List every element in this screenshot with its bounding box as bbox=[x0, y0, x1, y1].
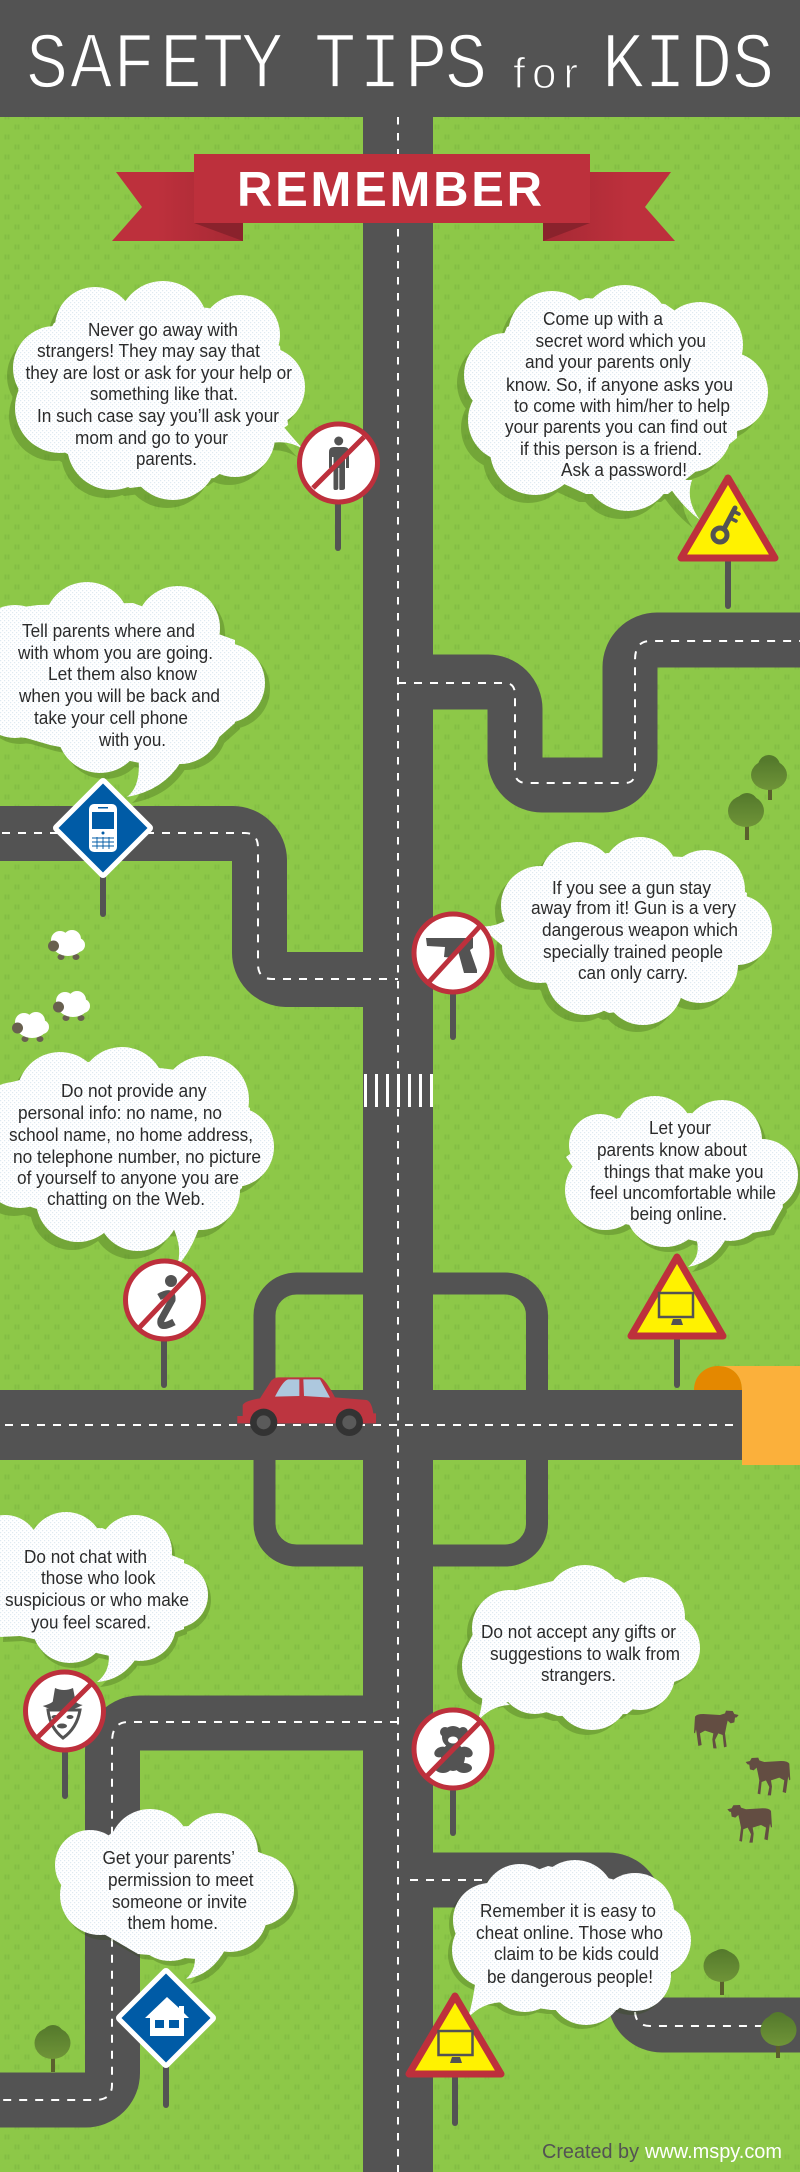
sign: secret key warning bbox=[681, 478, 775, 609]
sign: monitor warning lower bbox=[409, 1996, 501, 2126]
tip text: parents know about bbox=[597, 1140, 747, 1160]
icon: monitor bbox=[659, 1293, 693, 1325]
tip text: claim to be kids could bbox=[494, 1944, 659, 1964]
tip text: secret word which you bbox=[536, 331, 706, 351]
tree bbox=[728, 793, 764, 840]
icon: phone bbox=[89, 804, 117, 852]
lower left road bbox=[0, 1723, 398, 2100]
speech bubble: cheat online bbox=[448, 1860, 691, 2029]
tip text: no telephone number, no picture bbox=[13, 1147, 261, 1167]
tip text bbox=[5, 1547, 189, 1632]
tip text: Let your bbox=[649, 1118, 711, 1138]
tree bbox=[704, 1949, 740, 1995]
right ribbon tail bbox=[543, 172, 675, 241]
sheep 3 bbox=[12, 1012, 49, 1042]
sheep bbox=[12, 930, 90, 1042]
tip text: chatting on the Web. bbox=[47, 1189, 205, 1209]
tip text: when you will be back and bbox=[18, 686, 220, 706]
horizontal road bbox=[0, 1390, 742, 1460]
car bbox=[237, 1377, 376, 1436]
tip text: Let them also know bbox=[48, 664, 198, 684]
tip text: Never go away with bbox=[88, 320, 238, 340]
sheep 1 bbox=[48, 930, 85, 960]
tip text: be dangerous people! bbox=[487, 1967, 653, 1987]
tip text: personal info: no name, no bbox=[18, 1103, 222, 1123]
icon: info letter bbox=[159, 1275, 177, 1326]
tip text: Do not provide any bbox=[61, 1081, 206, 1101]
tip text: with whom you are going. bbox=[17, 643, 213, 663]
tip text: Get your parents’ bbox=[102, 1848, 235, 1868]
speech bubble: gifts bbox=[457, 1565, 700, 1735]
tip text: and your parents only bbox=[525, 352, 691, 372]
sign: cell phone diamond bbox=[57, 782, 149, 917]
crosswalk bbox=[364, 1074, 433, 1107]
icon: key bbox=[713, 508, 739, 542]
tip text: suggestions to walk from bbox=[490, 1644, 680, 1664]
sign: home diamond bbox=[120, 1972, 212, 2108]
icon: house bbox=[145, 1997, 189, 2036]
speech bubble: parents permission bbox=[55, 1809, 298, 1984]
tip text bbox=[17, 621, 220, 750]
tip text: parents. bbox=[136, 449, 197, 469]
tip text: you feel scared. bbox=[31, 1612, 151, 1632]
icon: person bbox=[329, 436, 349, 490]
sign: no gun bbox=[414, 914, 492, 1040]
tip text bbox=[102, 1848, 254, 1933]
tunnel bbox=[694, 1366, 800, 1465]
upper left winding road bbox=[0, 833, 398, 980]
tip text: Do not accept any gifts or bbox=[481, 1622, 676, 1642]
tip text bbox=[481, 1622, 680, 1685]
ring road around crossing bbox=[264, 1284, 537, 1556]
speech bubble: gun bbox=[480, 837, 772, 1032]
title: KIDS bbox=[602, 20, 774, 111]
tip text: being online. bbox=[630, 1204, 727, 1224]
speech bubble: strangers bbox=[7, 281, 305, 508]
tip text: Do not chat with bbox=[24, 1547, 147, 1567]
trees bbox=[34, 755, 796, 2072]
tip text: cheat online. Those who bbox=[476, 1923, 663, 1943]
speech bubble: personal info bbox=[0, 1047, 274, 1268]
tip text: feel uncomfortable while bbox=[590, 1183, 776, 1203]
tip text: If you see a gun stay bbox=[552, 878, 711, 898]
tip text: with you. bbox=[98, 730, 166, 750]
title: SAFETY bbox=[26, 20, 283, 111]
speech bubble: secret word bbox=[457, 285, 768, 528]
icon: gun bbox=[426, 938, 477, 973]
speech bubble: tell parents bbox=[0, 582, 270, 803]
tip text: your parents you can find out bbox=[505, 417, 727, 437]
tip text: suspicious or who make bbox=[5, 1590, 189, 1610]
tip text: take your cell phone bbox=[34, 708, 188, 728]
tree bbox=[34, 2025, 70, 2072]
upper right winding road bbox=[398, 640, 800, 785]
tip text: strangers. bbox=[541, 1665, 616, 1685]
sheep 2 bbox=[53, 991, 90, 1021]
tip text: Tell parents where and bbox=[22, 621, 195, 641]
tip text: mom and go to your bbox=[75, 428, 228, 448]
tip text: permission to meet bbox=[108, 1870, 254, 1890]
tip text: In such case say you’ll ask your bbox=[37, 406, 279, 426]
tip text bbox=[26, 320, 292, 469]
tip text bbox=[9, 1081, 261, 1209]
icon: spy bbox=[43, 1688, 83, 1738]
tip text: strangers! They may say that bbox=[37, 341, 260, 361]
main vertical road bbox=[363, 117, 433, 2172]
tip text: they are lost or ask for your help or bbox=[26, 363, 292, 383]
tip text: someone or invite bbox=[112, 1892, 247, 1912]
sign: no personal info bbox=[126, 1261, 204, 1388]
tip text: if this person is a friend. bbox=[520, 439, 702, 459]
tip text bbox=[531, 878, 738, 983]
tree bbox=[751, 755, 787, 800]
title: TIPS bbox=[314, 20, 487, 111]
speech bubble: uncomfortable online bbox=[565, 1096, 800, 1272]
tip text bbox=[476, 1901, 663, 1987]
lower right road bbox=[398, 1880, 800, 2025]
cow 1 bbox=[694, 1711, 739, 1748]
tip text: specially trained people bbox=[543, 942, 723, 962]
icon: monitor bbox=[438, 2031, 472, 2063]
tip text: Ask a password! bbox=[561, 460, 687, 480]
tip text: something like that. bbox=[90, 384, 238, 404]
cow 3 bbox=[727, 1805, 772, 1843]
credit footer: Created by bbox=[542, 2141, 639, 2163]
tip text: away from it! Gun is a very bbox=[531, 898, 736, 918]
cow 2 bbox=[746, 1758, 790, 1795]
speech bubble: suspicious people bbox=[0, 1512, 211, 1687]
tip text: Come up with a bbox=[543, 309, 664, 329]
tree bbox=[760, 2012, 796, 2058]
icon: teddy bear bbox=[433, 1726, 474, 1773]
tip text: school name, no home address, bbox=[9, 1125, 253, 1145]
header bar with title bbox=[0, 0, 800, 117]
tip text: of yourself to anyone you are bbox=[17, 1168, 239, 1188]
tip text bbox=[590, 1118, 776, 1224]
credit footer: www.mspy.com bbox=[644, 2141, 782, 2163]
sign: no strangers bbox=[300, 424, 378, 551]
tip text: them home. bbox=[128, 1913, 218, 1933]
tip text: know. So, if anyone asks you bbox=[506, 375, 733, 395]
sign: monitor warning bbox=[631, 1257, 723, 1388]
sign: no spy bbox=[26, 1672, 104, 1799]
tip text: can only carry. bbox=[578, 963, 688, 983]
tip text: things that make you bbox=[604, 1162, 764, 1182]
banner: remember bbox=[112, 154, 675, 241]
title bbox=[26, 20, 774, 111]
tip text: Remember it is easy to bbox=[480, 1901, 656, 1921]
sign: no teddy bear bbox=[414, 1710, 492, 1836]
credit footer bbox=[542, 2141, 782, 2163]
title: for bbox=[513, 49, 578, 98]
banner text: REMEMBER bbox=[237, 163, 542, 217]
left ribbon tail bbox=[112, 172, 243, 241]
tip text: those who look bbox=[41, 1568, 156, 1588]
tip text: dangerous weapon which bbox=[542, 920, 738, 940]
cows bbox=[694, 1711, 790, 1843]
tip text: to come with him/her to help bbox=[514, 396, 730, 416]
tip text bbox=[505, 309, 733, 480]
